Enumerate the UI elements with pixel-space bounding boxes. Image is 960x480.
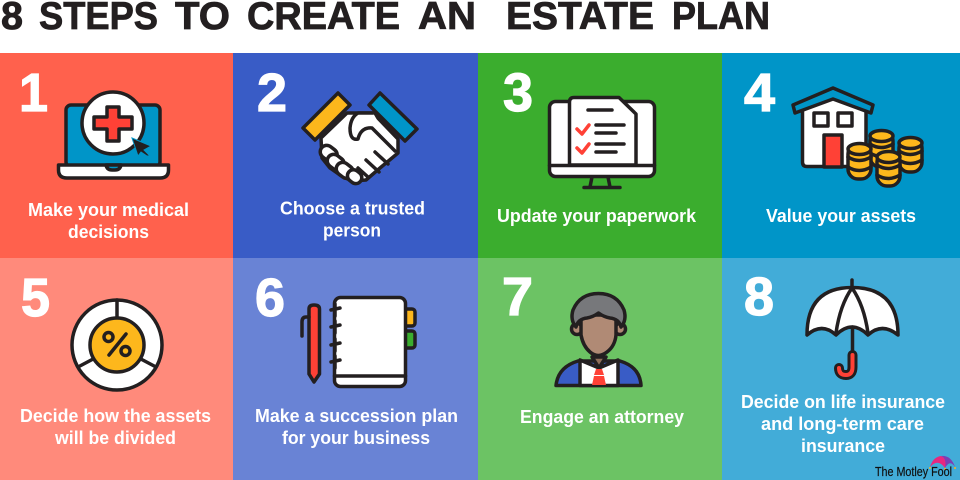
step 6 label: for your business: [282, 428, 430, 448]
logo: The Motley Fool: [875, 456, 956, 479]
icon: laptop with medical cross: [58, 92, 168, 178]
step 6 label: [255, 406, 458, 448]
panel: step 5: [0, 258, 233, 480]
step 8 label: [741, 392, 945, 456]
step 7 label: Engage an attorney: [520, 407, 684, 427]
step 1 label: [28, 200, 189, 242]
step 8 label: Decide on life insurance: [741, 392, 945, 412]
step 2 label: [280, 198, 425, 240]
step 5 label: [20, 406, 211, 448]
panel: step 6: [233, 258, 478, 480]
step 2 label: Choose a trusted: [280, 198, 425, 218]
step 8 label: insurance: [801, 436, 885, 456]
step 5 label: will be divided: [54, 428, 176, 448]
step 6 label: Make a succession plan: [255, 406, 458, 426]
icon: handshake: [303, 93, 417, 186]
step 5 number: 5: [21, 268, 50, 328]
title: [1, 0, 770, 38]
step 8 number: 8: [744, 267, 774, 327]
step 6 number: 6: [255, 268, 285, 328]
panel: step 4: [722, 53, 960, 258]
icon: pen and notebook: [302, 298, 415, 386]
icon: house and coins: [793, 88, 922, 186]
step 4 number: 4: [744, 63, 775, 123]
panel: step 1: [0, 53, 233, 258]
panel: step 3: [478, 53, 722, 258]
step 1 number: 1: [19, 63, 48, 123]
step 2 number: 2: [257, 63, 287, 123]
icon: umbrella: [807, 280, 898, 375]
step 8 label: and long-term care: [761, 414, 924, 434]
panel: step 8: [722, 258, 960, 480]
step 2 label: person: [323, 220, 381, 240]
icon: percent donut chart: [72, 300, 162, 390]
step 3 number: 3: [503, 63, 533, 123]
step 5 label: Decide how the assets: [20, 406, 211, 426]
step 7 number: 7: [502, 267, 533, 327]
step 3 label: Update your paperwork: [497, 206, 697, 226]
step 4 label: Value your assets: [766, 206, 916, 226]
step 1 label: decisions: [68, 222, 149, 242]
icon: attorney: [556, 294, 641, 386]
step 1 label: Make your medical: [28, 200, 189, 220]
panel: step 2: [233, 53, 478, 258]
panel: step 7: [478, 258, 722, 480]
icon: monitor with checklist: [550, 98, 654, 188]
